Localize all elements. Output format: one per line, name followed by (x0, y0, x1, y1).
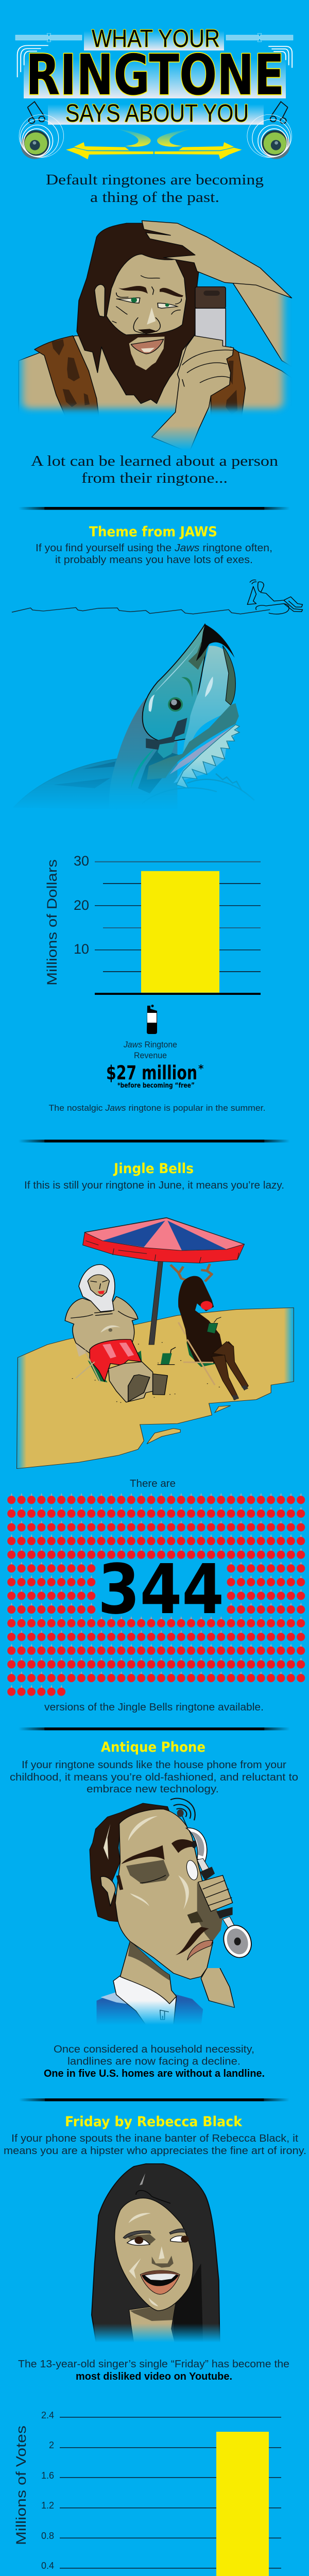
title decoration: arcs, notes, speakers and arrows (18, 45, 292, 159)
text: Jaws summer note: The nostalgic Jaws ringtone is popular in the summer. (48, 1103, 266, 1113)
lead-in text: from their ringtone... (81, 470, 228, 486)
icon: cell phone (147, 1005, 157, 1034)
caveman eyes and brows (112, 276, 183, 323)
illustration: caveman on a phone (19, 221, 291, 452)
chart axis labels (41, 2410, 54, 2571)
title decoration: hatched bars (15, 33, 293, 42)
text: landline decline: One in five U.S. homes are without a landline. (44, 2068, 265, 2079)
text: most disliked video (18, 2359, 289, 2382)
water surface line (12, 607, 270, 614)
caveman nose (133, 308, 160, 334)
hair (90, 1803, 169, 1922)
shark (14, 624, 254, 809)
Santa (65, 1264, 167, 1402)
arm (201, 1968, 235, 2008)
chart axis labels: 2 (49, 2440, 54, 2450)
caveman hand on head (142, 221, 291, 298)
illustration: man with antique phone (90, 1799, 255, 2026)
text: Jingle Bells description: If this is still your ringtone in June, it means you’re lazy. (24, 1180, 284, 1191)
text: Jaws ringtone revenue (106, 1040, 204, 1090)
text: versions available: versions of the Jingle Bells ringtone available. (44, 1702, 264, 1713)
lead-in text: A lot can be learned about a person (31, 453, 278, 469)
shirt (97, 1976, 203, 2026)
chart axis labels: 0.8 (41, 2531, 54, 2541)
face highlights and shadow (128, 1816, 222, 1942)
bar chart: likes and dislikes (13, 2410, 281, 2576)
chart grid lines (95, 861, 261, 995)
lead-in text (31, 453, 278, 486)
divider (19, 507, 290, 510)
caveman hand on phone (152, 336, 233, 452)
title (15, 25, 293, 159)
chart axis labels: 1.6 (41, 2470, 54, 2481)
text: Jaws ringtone revenue: Jaws Ringtone (123, 1040, 177, 1049)
illustration: Santa and reindeer on the beach (17, 1217, 294, 1469)
text: landline decline (44, 2044, 265, 2079)
eyes and brows (123, 2229, 189, 2245)
hair (92, 2164, 220, 2345)
antique phone receiver (185, 1828, 255, 1960)
text: Antique Phone description: If your ringtone sounds like the house phone from your (22, 1759, 286, 1771)
text: landline decline: landlines are now facing a decline. (67, 2056, 241, 2067)
caveman phone (195, 286, 226, 346)
reindeer (170, 1264, 248, 1400)
chart axis labels: 10 (74, 941, 89, 957)
text: Friday description: means you are a hipster who appreciates the fine art of irony. (4, 2145, 306, 2157)
juice box (207, 1323, 218, 1333)
chart axis title: Millions of Votes (13, 2426, 29, 2545)
heading: Friday by Rebecca Black: Friday by Rebecca Black (65, 2114, 243, 2130)
illustration: Rebecca Black (92, 2164, 220, 2345)
ornament pictogram: 344 versions (6, 1493, 306, 1698)
intro text: Default ringtones are becoming (46, 172, 264, 188)
heading: Antique Phone: Antique Phone (101, 1739, 205, 1755)
chart axis labels: 30 (74, 853, 89, 869)
face (115, 2198, 193, 2311)
sand specks (72, 1342, 220, 1403)
text: Jaws ringtone revenue: *before becoming “free” (117, 1082, 195, 1090)
umbrella (83, 1217, 245, 1263)
highlights (129, 2213, 165, 2307)
neck (129, 2307, 174, 2342)
text: Jaws ringtone revenue: Revenue (134, 1050, 167, 1060)
Santa's legs (108, 1362, 154, 1402)
hair parting (136, 2191, 170, 2204)
chart axis labels (74, 853, 89, 957)
shadow by nose (126, 2234, 174, 2268)
heading: Theme from JAWS: Theme from JAWS (89, 524, 217, 540)
intro text (46, 172, 264, 206)
text: Antique Phone description: childhood, it means you’re old-fashioned, and reluctant to (10, 1772, 298, 1783)
text: Friday description (4, 2133, 306, 2157)
divider (19, 2098, 289, 2101)
chart axis labels: 1.2 (41, 2500, 54, 2511)
beach (17, 1308, 294, 1469)
text: Jaws description: it probably means you have lots of exes. (55, 554, 253, 566)
chart grid lines (60, 2417, 281, 2576)
text: most disliked video: most disliked video on Youtube. (76, 2371, 232, 2382)
eye and brow (121, 1839, 195, 1884)
text: Friday description: If your phone spouts the inane banter of Rebecca Black, it (11, 2133, 298, 2144)
heading: Jingle Bells: Jingle Bells (113, 1161, 194, 1177)
bar chart: Jaws ringtone revenue (44, 853, 261, 995)
title panels (24, 28, 286, 125)
caveman raised arm and hair (197, 264, 291, 367)
face (115, 1809, 213, 1979)
Santa's trunks (90, 1340, 142, 1382)
divider (19, 1140, 290, 1143)
divider (19, 1727, 290, 1730)
illustration: shark and swimmer (12, 580, 302, 809)
text: Antique Phone description (10, 1759, 298, 1795)
chart axis title: Millions of Dollars (44, 859, 60, 986)
big number 344: 344 (98, 1550, 224, 1630)
text: there are: There are (130, 1478, 176, 1489)
intro text: a thing of the past. (90, 190, 219, 206)
text: Jaws ringtone revenue: $27 million (106, 1062, 197, 1084)
chart bars (74, 2432, 269, 2576)
caveman tunic (35, 336, 245, 422)
swimmer on a ring (247, 580, 302, 614)
text: most disliked video: The 13-year-old singer’s single “Friday” has become the (18, 2359, 289, 2370)
chart axis labels: 0.4 (41, 2561, 54, 2571)
neck (120, 1941, 177, 2004)
chart axis labels: 20 (74, 897, 89, 913)
text: landline decline: Once considered a household necessity, (54, 2044, 254, 2055)
mouth (140, 2270, 180, 2294)
umbrella pole (149, 1261, 163, 1345)
text: Jaws description (36, 543, 272, 566)
moustache and lips (176, 1927, 213, 1960)
ringing waves (170, 1799, 195, 1827)
cup with straw (158, 1347, 176, 1365)
title text: says about you: SAYS ABOUT YOU (65, 100, 249, 127)
caveman face (107, 254, 186, 335)
text: Jaws description: If you find yourself using the Jaws ringtone often, (36, 543, 272, 554)
caveman lips (131, 339, 164, 354)
text: Antique Phone description: embrace new technology. (87, 1784, 219, 1795)
text: Jaws ringtone revenue: * (198, 1062, 204, 1075)
caveman body (19, 336, 291, 422)
chart bar (141, 871, 219, 993)
title text: what your: WHAT YOUR (92, 25, 220, 53)
chart axis labels: 2.4 (41, 2410, 54, 2420)
